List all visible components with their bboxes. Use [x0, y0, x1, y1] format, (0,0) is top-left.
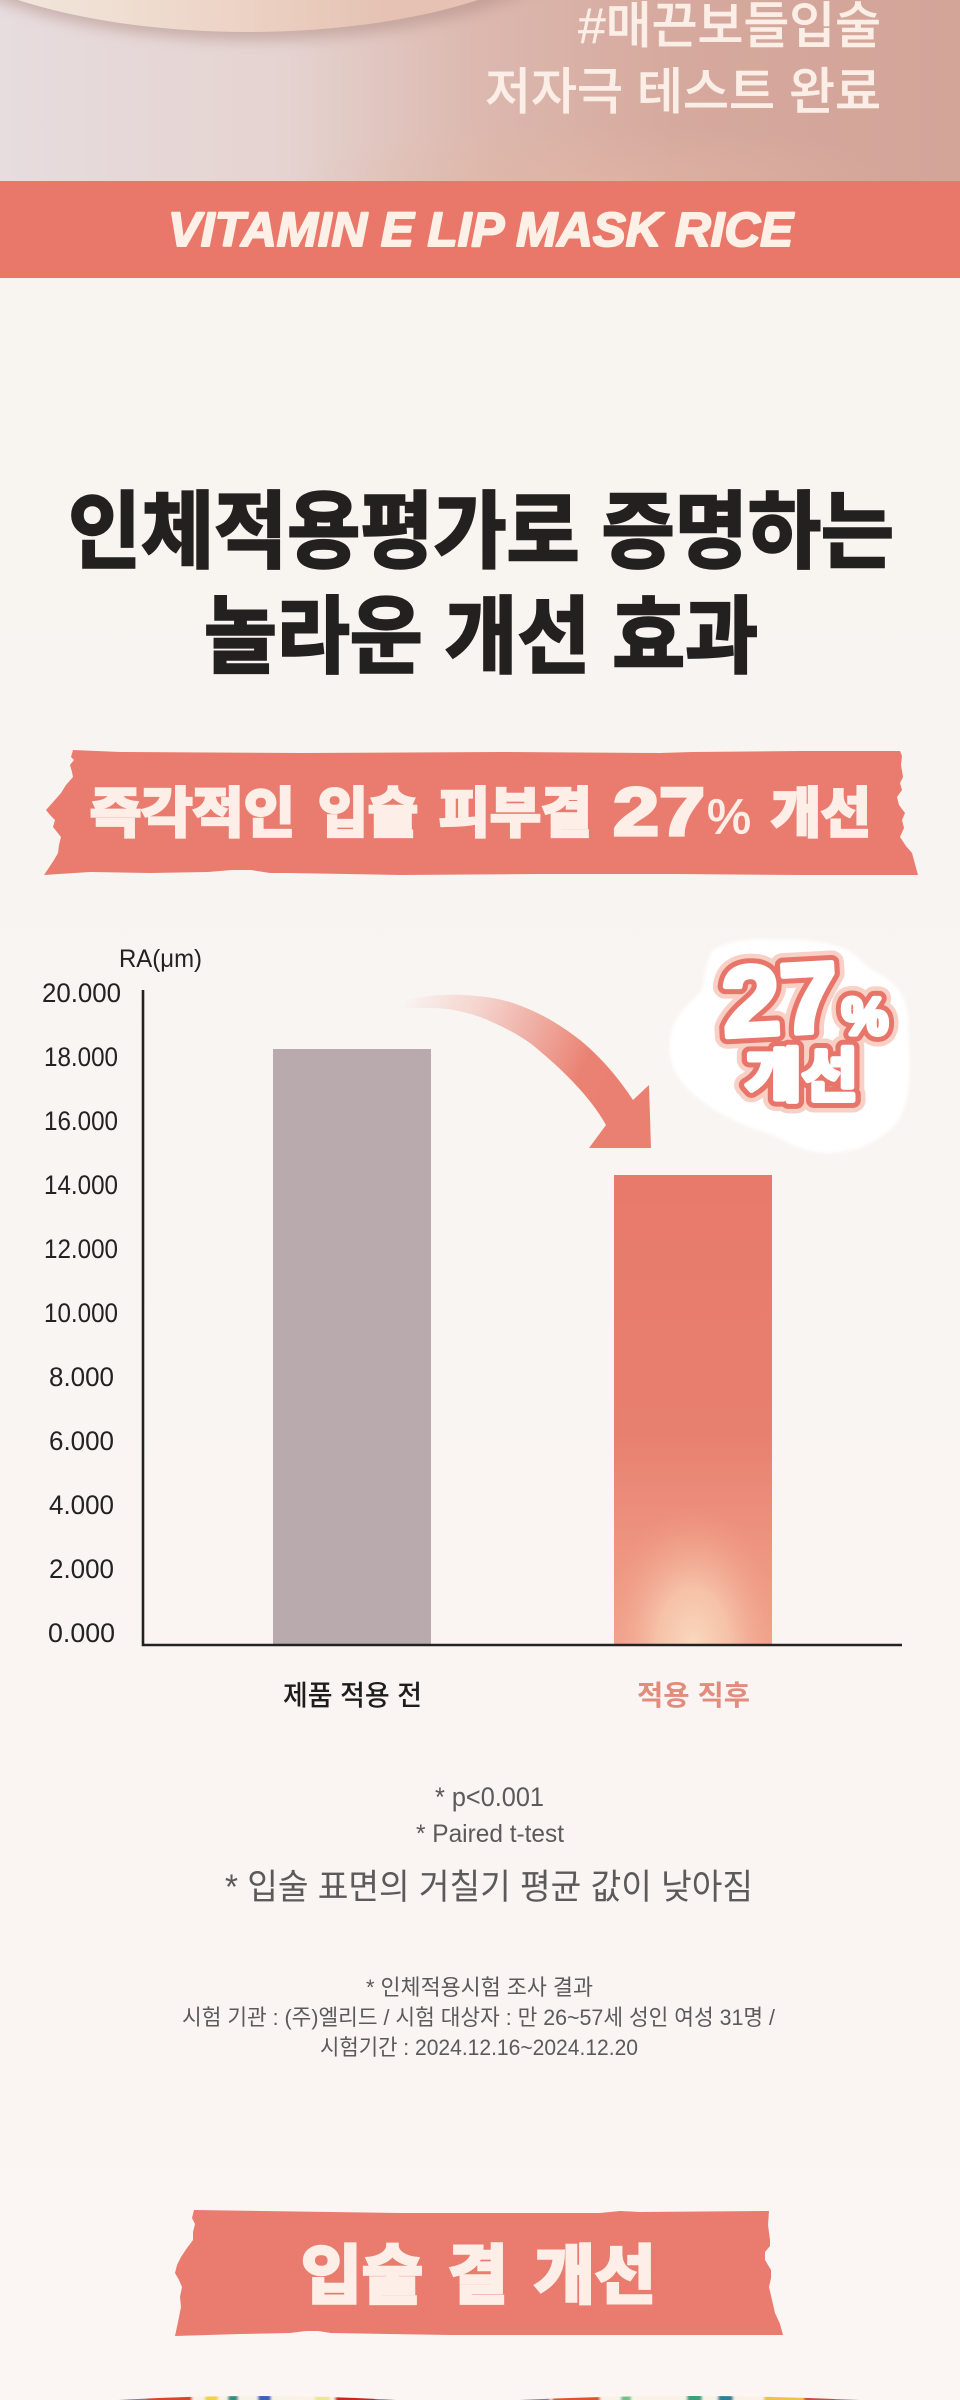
y axis labels: 10.000	[44, 1298, 118, 1328]
product name band: VITAMIN E LIP MASK RICE	[168, 204, 795, 257]
y axis labels: 8.000	[49, 1362, 114, 1392]
y axis unit: RA(μm)	[119, 945, 202, 973]
low irritation line: 저자극 테스트 완료	[485, 64, 881, 120]
y axis labels: 16.000	[44, 1106, 118, 1136]
white blob	[669, 939, 910, 1153]
footnote: statistics	[225, 1782, 753, 1907]
banner headline: 입술	[301, 2240, 423, 2312]
footnote: test details: 시험기간 : 2024.12.16~2024.12.20	[320, 2035, 638, 2060]
x label: after: 적용 직후	[637, 1680, 750, 1711]
y axis labels: 12.000	[44, 1234, 118, 1264]
footnote: test details: 시험 기관 : (주)엘리드 / 시험 대상자 : 만 26~57세 성인 여성 31명 /	[182, 2005, 776, 2030]
banner headline: 입술	[318, 784, 418, 844]
x label: before: 제품 적용 전	[283, 1680, 422, 1711]
badge number outer glow: 27	[719, 941, 841, 1059]
badge: 27% improvement	[669, 939, 910, 1153]
main title: 놀라운 개선 효과	[204, 590, 758, 684]
product name band	[0, 181, 960, 278]
y axis labels	[42, 978, 121, 1648]
heatmap image: left, cropped	[119, 2396, 396, 2400]
bar: after	[614, 1175, 772, 1644]
banner headline: 즉각적인	[90, 784, 295, 844]
y axis labels: 14.000	[44, 1170, 118, 1200]
y axis labels: 18.000	[44, 1042, 118, 1072]
footnote: statistics: * Paired t-test	[416, 1820, 564, 1848]
y axis labels: 20.000	[42, 978, 121, 1008]
top photo panel	[0, 0, 960, 181]
banner headline: 피부결	[439, 784, 592, 844]
main title	[68, 485, 894, 684]
y axis labels: 0.000	[48, 1618, 115, 1648]
badge number outer glow	[719, 941, 888, 1109]
badge number	[719, 941, 888, 1109]
badge number outer glow: 개선	[745, 1044, 858, 1109]
badge number outline: %	[842, 988, 888, 1046]
badge number: %	[842, 988, 888, 1046]
arrow: before to after	[400, 995, 651, 1148]
footnote: statistics: * 입술 표면의 거칠기 평균 값이 낮아짐	[225, 1868, 753, 1907]
tape banner: 27% improvement	[44, 750, 918, 875]
banner headline: 개선	[534, 2240, 656, 2312]
banner headline: 27	[613, 774, 705, 850]
banner headline: 결	[448, 2240, 508, 2312]
product bowl	[18, 0, 478, 32]
tape banner: lip texture	[175, 2210, 783, 2336]
y axis labels: 6.000	[49, 1426, 114, 1456]
y axis labels: 2.000	[49, 1554, 114, 1584]
axes	[143, 990, 902, 1645]
banner headline: 개선	[771, 784, 871, 844]
footnote: test details: * 인체적용시험 조사 결과	[366, 1975, 593, 2000]
bowl shadow	[0, 0, 610, 40]
badge number outline	[719, 941, 888, 1109]
badge number outline: 개선	[745, 1044, 858, 1109]
bar: before	[273, 1049, 431, 1644]
main title: 인체적용평가로 증명하는	[68, 485, 894, 579]
footnote: test details	[182, 1975, 776, 2060]
banner headline	[90, 774, 871, 850]
badge number outer glow: %	[842, 988, 888, 1046]
badge number: 개선	[745, 1044, 858, 1109]
banner headline: %	[707, 791, 751, 844]
footnote: statistics: * p<0.001	[435, 1782, 544, 1812]
y axis labels: 4.000	[49, 1490, 114, 1520]
heatmap image: right, cropped	[520, 2396, 859, 2400]
badge number outline: 27	[719, 941, 841, 1059]
bar chart	[42, 945, 902, 1711]
badge number: 27	[719, 941, 841, 1059]
banner headline	[301, 2240, 656, 2312]
